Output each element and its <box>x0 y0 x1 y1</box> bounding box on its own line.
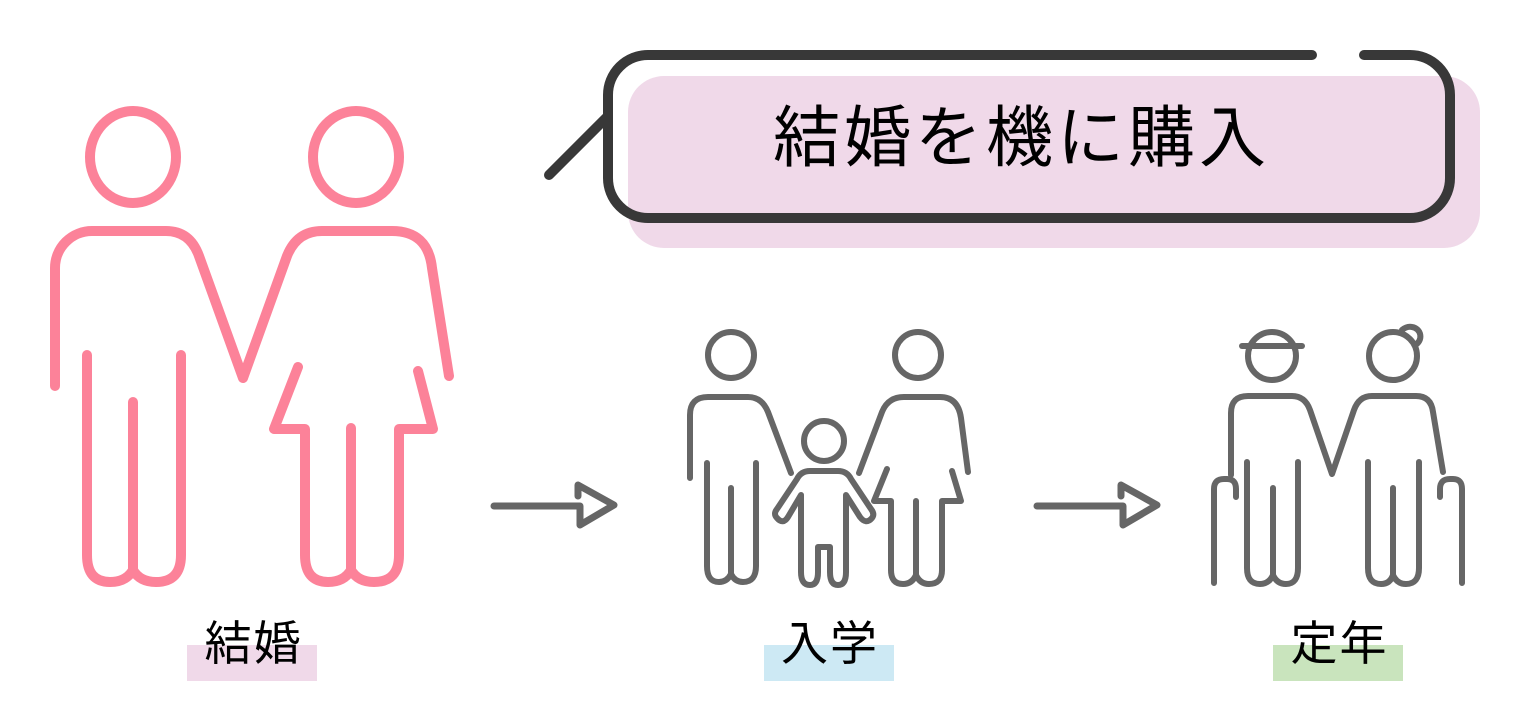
label: marriage <box>187 617 317 681</box>
label: school entry: 入学 <box>781 617 879 670</box>
icon: elderly couple with canes <box>1214 327 1462 584</box>
label: school entry <box>764 617 894 681</box>
icon: married couple <box>55 111 449 582</box>
callout: speech bubble <box>549 55 1480 248</box>
arrow: school to retirement <box>1037 485 1157 525</box>
callout: speech bubble: 結婚を機に購入 <box>773 101 1270 176</box>
icon: family with child <box>690 332 968 585</box>
label: retirement <box>1273 617 1403 681</box>
arrow: marriage to school <box>494 485 614 525</box>
label: retirement: 定年 <box>1290 617 1388 670</box>
label: marriage: 結婚 <box>204 617 302 670</box>
